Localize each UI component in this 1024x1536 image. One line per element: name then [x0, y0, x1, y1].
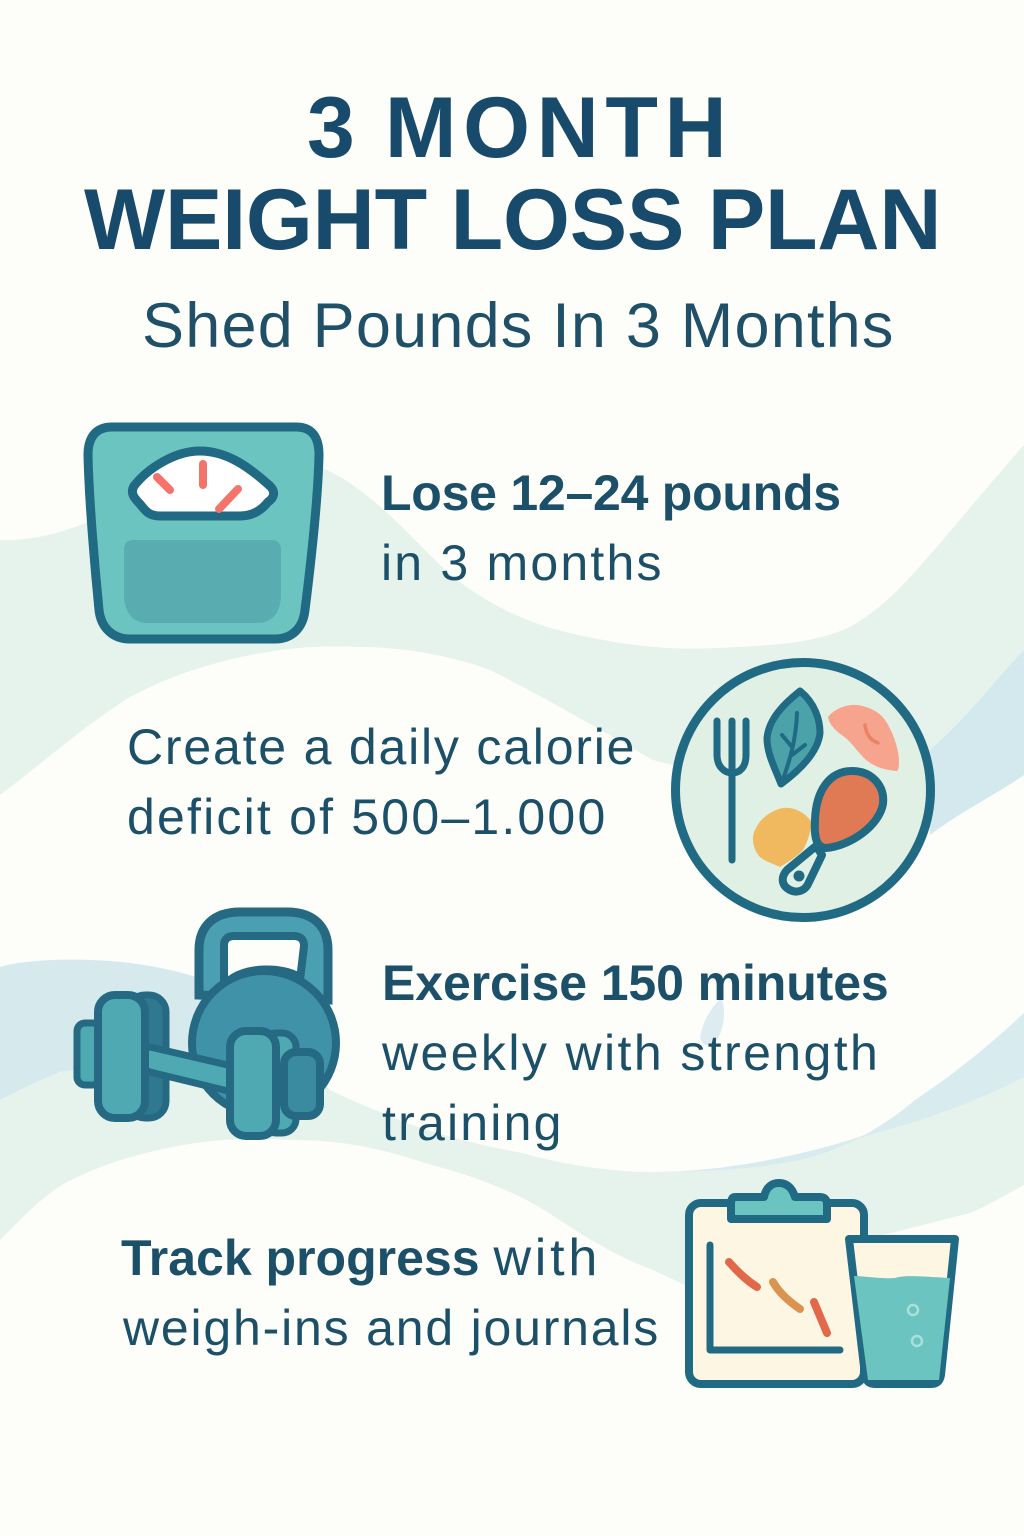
- subtitle: Shed Pounds In 3 Months: [142, 291, 895, 361]
- text: exercise: training: [382, 1095, 564, 1151]
- text: calorie deficit: Create a daily calorie: [127, 719, 636, 775]
- text: exercise: [382, 955, 889, 1151]
- text: exercise: Exercise 150 minutes: [382, 955, 889, 1011]
- text: lose pounds: Lose 12–24 pounds: [381, 465, 841, 521]
- icon: clipboard and water glass: [685, 1179, 959, 1388]
- icon: scale: [84, 422, 324, 644]
- text: calorie deficit: [127, 719, 636, 845]
- text: track progress: weigh-ins and journals: [123, 1300, 660, 1356]
- text: calorie deficit: deficit of 500–1.000: [127, 789, 607, 845]
- text: exercise: weekly with strength: [382, 1025, 880, 1081]
- text: lose pounds: in 3 months: [381, 535, 664, 591]
- title: 3 MONTH: [307, 80, 733, 176]
- icon: kettlebell and dumbbell: [74, 908, 340, 1140]
- title: [84, 80, 941, 268]
- icon: plate: [671, 658, 935, 922]
- text: lose pounds: [381, 465, 841, 591]
- text: track progress: Track progress with: [121, 1229, 601, 1287]
- title: WEIGHT LOSS PLAN: [84, 172, 941, 268]
- text: track progress: [121, 1229, 660, 1356]
